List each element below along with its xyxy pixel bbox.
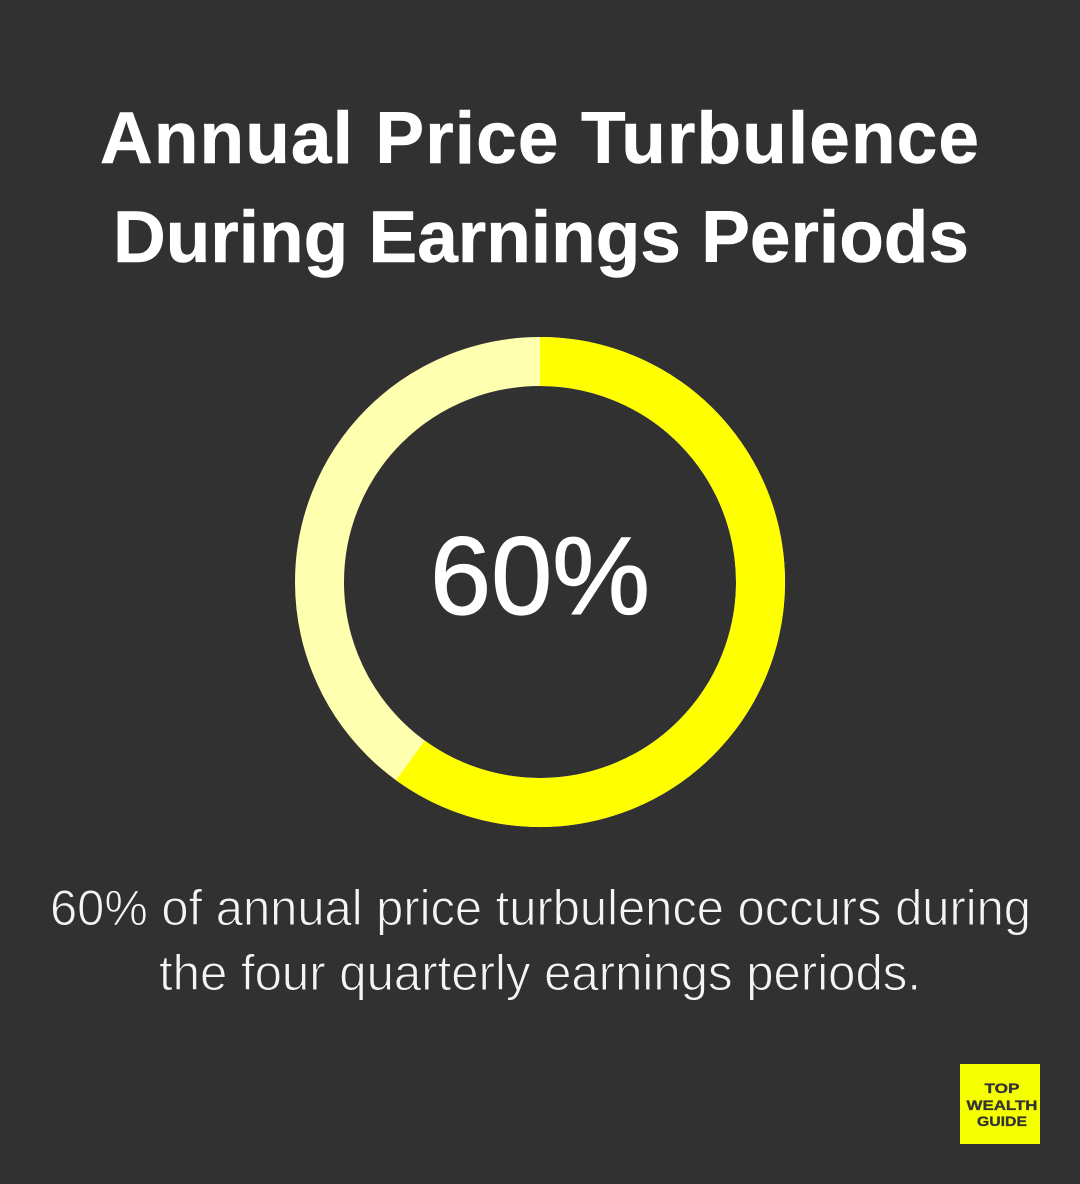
- description text: 60% of annual price turbulence occurs during: [50, 880, 1031, 936]
- title: [100, 98, 979, 278]
- logo badge: WEALTH: [966, 1098, 1038, 1113]
- logo badge: GUIDE: [977, 1114, 1027, 1129]
- title: During Earnings Periods: [113, 197, 969, 278]
- logo badge: TOP: [984, 1081, 1020, 1096]
- donut chart: 60%: [320, 362, 760, 802]
- remaining 40% segment: [320, 362, 760, 802]
- center value: 60%: [430, 515, 650, 638]
- title: Annual Price Turbulence: [100, 98, 979, 179]
- description text: [50, 880, 1031, 1001]
- description text: the four quarterly earnings periods.: [159, 945, 921, 1001]
- logo badge: [960, 1064, 1040, 1144]
- highlighted 60% segment: [410, 362, 760, 802]
